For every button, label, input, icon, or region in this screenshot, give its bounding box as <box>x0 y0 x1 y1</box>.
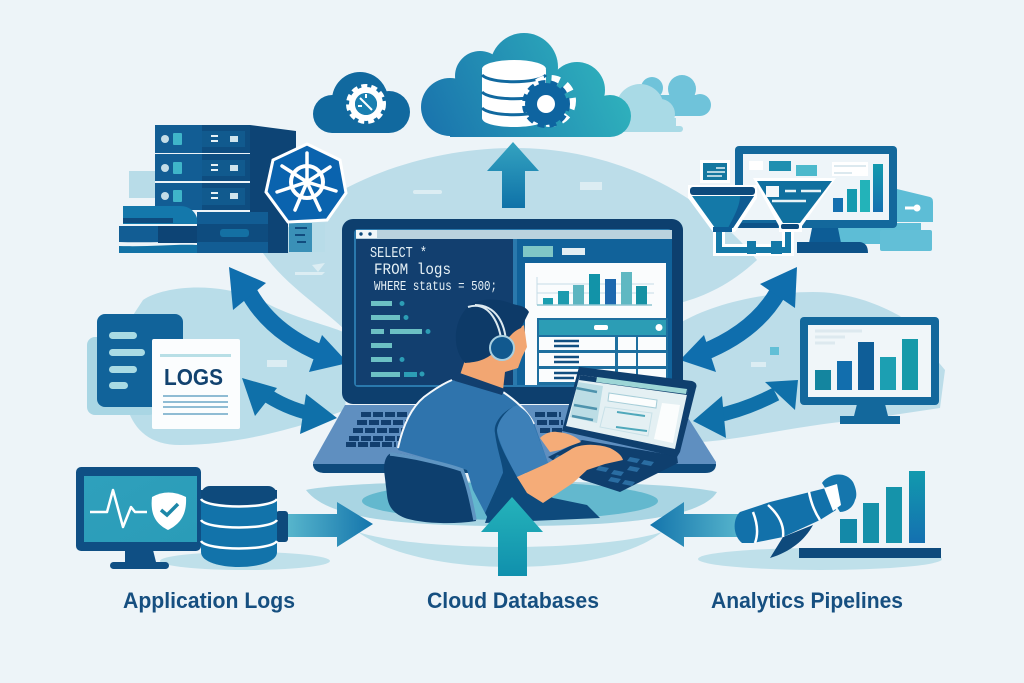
icon: telescope <box>735 475 856 558</box>
icon: shield check <box>152 492 186 530</box>
document <box>700 160 730 183</box>
label: application logs: Application Logs <box>123 588 295 613</box>
left blob backdrop <box>87 288 350 445</box>
pipe fill <box>719 226 788 250</box>
panel: application logs monitor and database <box>76 467 330 570</box>
arrow: bottom left <box>288 502 373 547</box>
bars <box>840 471 925 543</box>
pipes <box>719 226 788 250</box>
arrow: bottom right <box>650 502 745 547</box>
lap <box>485 470 600 523</box>
bar chart <box>537 272 654 305</box>
monitor <box>76 467 201 569</box>
server unit 1 <box>155 125 250 153</box>
arrow: top left double arrow <box>229 267 348 372</box>
icon: kubernetes wheel <box>266 144 346 222</box>
icon: heartbeat line <box>90 490 147 527</box>
headphones <box>468 305 514 360</box>
panel: application logs documents <box>87 314 240 429</box>
arrow: left mid double arrow <box>242 378 337 434</box>
main monitor <box>342 219 683 404</box>
bottom glow ellipses <box>306 481 717 567</box>
sleeve <box>497 405 548 477</box>
arrow: right mid double arrow <box>693 380 798 438</box>
server unit 2 <box>155 154 250 181</box>
icon: small gear <box>348 86 384 122</box>
laptop screen <box>562 366 696 457</box>
person <box>398 299 600 523</box>
chair <box>384 453 476 523</box>
logs label: LOGS <box>164 364 223 390</box>
sql text: WHERE status = 500; <box>374 280 497 295</box>
neck and face <box>460 325 527 390</box>
panel: analytics pipelines <box>698 471 942 570</box>
torso <box>398 380 548 513</box>
database <box>201 486 277 567</box>
panel: funnels and dashboard <box>688 146 933 254</box>
sql text: FROM logs <box>374 261 451 279</box>
server rack side <box>250 125 296 215</box>
cloud: rear light clouds <box>612 75 711 132</box>
connector <box>276 511 288 542</box>
front laptop <box>548 366 696 492</box>
icon: gear <box>524 79 572 126</box>
server unit 3 <box>155 183 250 210</box>
arrow: bottom center up <box>481 497 543 576</box>
shirt edge highlight <box>398 380 534 448</box>
cloud: small gear cloud <box>313 72 410 133</box>
server drawers <box>119 206 197 253</box>
hair <box>456 299 529 363</box>
label: cloud databases: Cloud Databases <box>427 588 599 613</box>
server base unit <box>197 212 325 253</box>
valves <box>747 241 782 254</box>
central dome backdrop <box>263 148 757 400</box>
code panel <box>356 239 513 385</box>
laptop keys <box>554 455 654 486</box>
keyboard <box>346 414 564 444</box>
dark log panel <box>97 314 183 407</box>
icon: database <box>482 60 546 127</box>
laptop base <box>548 440 678 492</box>
arrow: up to cloud <box>487 142 539 208</box>
cloud: main cloud database <box>421 33 631 137</box>
sql text <box>370 246 497 295</box>
logs document <box>152 339 240 429</box>
decorative marks <box>267 182 779 367</box>
panel: right bar chart monitor <box>800 317 939 424</box>
data table <box>537 318 668 385</box>
code lines <box>371 301 430 377</box>
right blob backdrop <box>680 292 945 442</box>
label: analytics pipelines: Analytics Pipelines <box>711 588 903 613</box>
laptop deck <box>313 405 716 473</box>
arm and hands <box>517 432 623 503</box>
shirt seam <box>485 405 525 522</box>
collar <box>455 372 505 395</box>
funnel left <box>688 185 757 232</box>
panel: servers and kubernetes <box>119 125 346 253</box>
dashboard panel <box>517 239 672 385</box>
arrow: top right double arrow <box>680 267 797 372</box>
folders <box>838 189 933 251</box>
funnel right <box>753 178 836 232</box>
monitor <box>735 146 897 253</box>
sql text: SELECT * <box>370 246 427 262</box>
